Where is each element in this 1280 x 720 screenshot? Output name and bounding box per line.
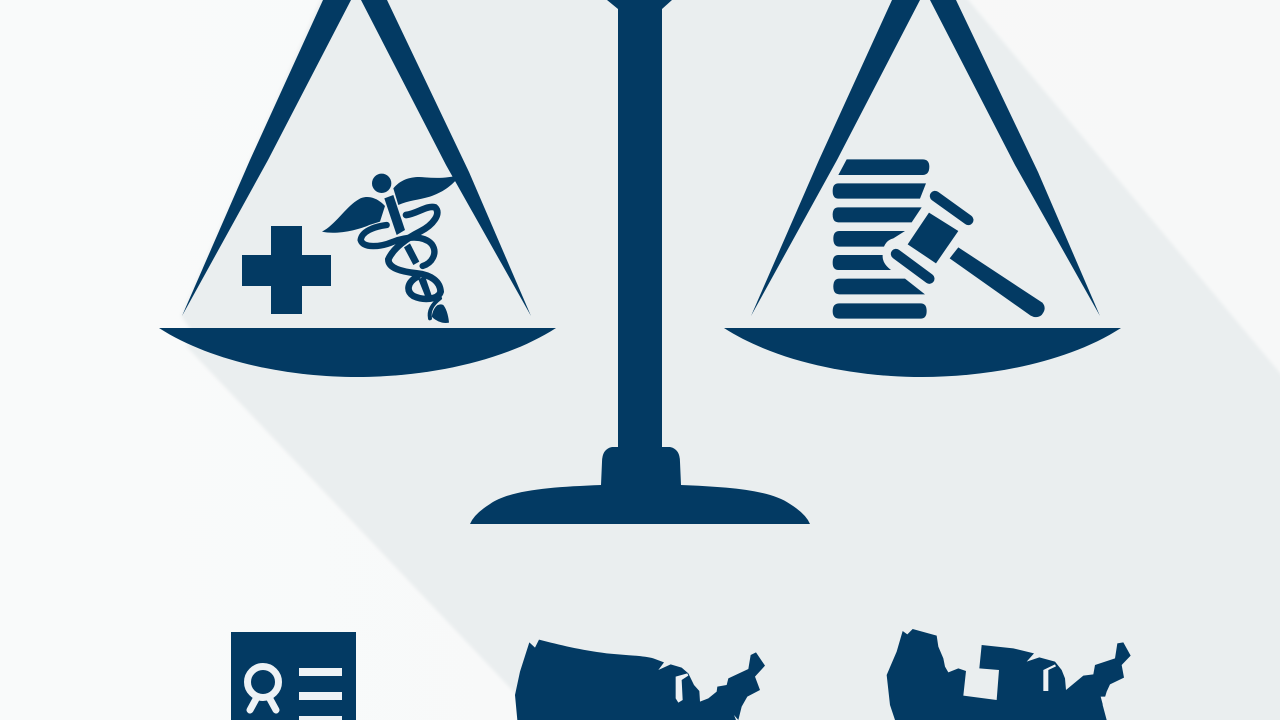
left scale pan — [159, 328, 556, 377]
icon: stack of books — [833, 159, 929, 319]
left pan suspension arms — [182, 0, 531, 316]
right pan suspension arms — [751, 0, 1100, 316]
scale stand: post and base — [470, 0, 810, 524]
certificate seal — [248, 666, 278, 710]
right scale pan — [724, 328, 1121, 377]
icon: medical cross — [242, 226, 331, 314]
certificate text lines — [299, 668, 342, 720]
map: United States with a cut-out state — [887, 629, 1131, 720]
icon: gavel — [896, 196, 1045, 317]
right pan assembly — [724, 0, 1121, 377]
map: contiguous United States — [515, 640, 765, 720]
icon: caduceus — [322, 174, 461, 323]
icon: certificate document — [231, 632, 356, 720]
left pan assembly — [159, 0, 556, 377]
